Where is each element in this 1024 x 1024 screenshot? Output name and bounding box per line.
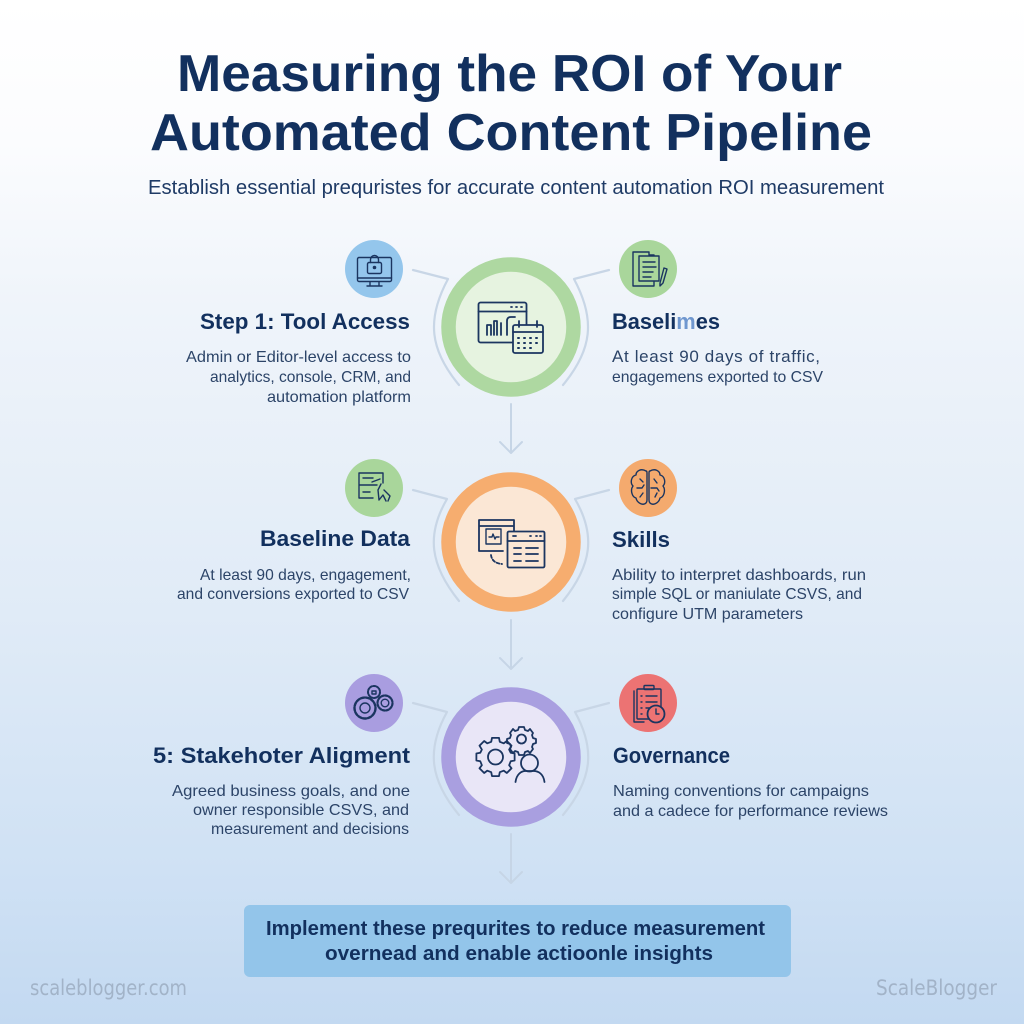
heading: 5: Stakehoter Aligment [153,743,411,768]
subtitle: Establish essential prequristes for accurate content automation ROI measurement [148,177,884,199]
description [612,347,823,386]
icon: chart windows [479,520,544,568]
description: and a cadece for performance reviews [613,803,888,820]
description: At least 90 days, engagement, [200,567,411,584]
heading: Baseline Data [260,526,411,551]
description [612,567,866,623]
description: Ability to interpret dashboards, run [612,567,866,584]
description [613,783,888,820]
connector brackets [413,703,609,815]
footer: brand: ScaleBlogger [876,976,997,1000]
panel: baseline data [177,459,411,603]
description: configure UTM parameters [612,606,803,623]
description [186,349,411,406]
panel: skills [612,459,866,623]
description: Naming conventions for campaigns [613,783,869,800]
heading: Baselimes [612,309,720,334]
footer: website: scaleblogger.com [30,976,187,1000]
heading: Governance [613,743,730,768]
callout [244,905,791,977]
description [177,567,411,603]
icon: gears and person [476,727,544,782]
panel: baselines [612,240,823,386]
icon: dashboard and calendar [478,302,543,353]
description: At least 90 days of traffic, [612,347,820,366]
callout: Implement these prequrites to reduce measurement [266,918,765,940]
icon: clipboard and clock [619,674,677,732]
panel: governance [613,674,888,820]
description: measurement and decisions [211,821,409,838]
arrow [500,834,522,883]
icon: brain [619,459,677,517]
panel: step 1 tool access [186,240,411,406]
title: Measuring the ROI of Your [177,45,842,103]
heading: Skills [612,527,670,552]
connector brackets [413,270,609,385]
description: and conversions exported to CSV [177,586,409,603]
description: engagemens exported to CSV [612,369,823,386]
description: Agreed business goals, and one [172,783,410,800]
connector brackets [413,490,609,601]
icon: locked monitor [345,240,403,298]
arrow [500,620,522,669]
arrow [500,404,522,453]
callout: overnead and enable actioonle insights [325,943,713,965]
heading: Step 1: Tool Access [200,309,410,334]
description: analytics, console, CRM, and [210,369,411,386]
description: Admin or Editor-level access to [186,349,411,366]
icon: documents and pen [619,240,677,298]
title [150,45,872,162]
icon: three gears [345,674,403,732]
description: owner responsible CSVS, and [193,802,409,819]
node: gears and person [413,694,609,820]
panel: stakeholder alignment [153,674,411,838]
description [172,783,410,838]
icon: data board and cursor [345,459,403,517]
node: monitoring windows [413,480,609,604]
description: simple SQL or maniulate CSVS, and [612,586,862,603]
node: analytics and calendar [413,264,609,390]
description: automation platform [267,389,411,406]
title: Automated Content Pipeline [150,104,872,162]
